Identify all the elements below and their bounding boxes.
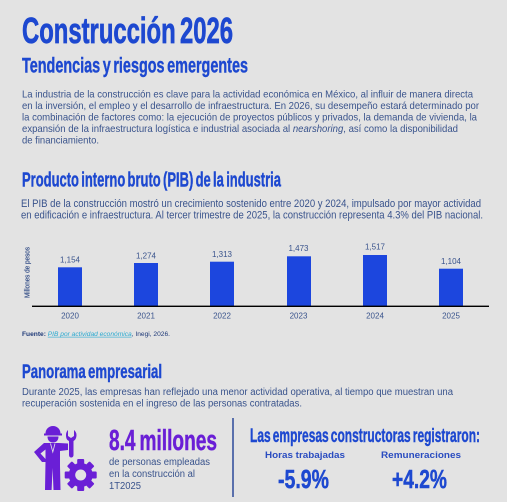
subtitle: Tendencias y riesgos emergentes [22,54,248,78]
year labels [61,312,460,320]
employed description: en la construcción al [109,469,195,480]
vertical divider [232,418,234,497]
y axis label: Millones de pesos [22,247,32,298]
value labels: 1,274 [136,252,157,260]
panorama paragraph: Durante 2025, las empresas han reflejado una menor actividad operativa, al tiempo que muestran una [22,387,453,398]
bars [58,255,463,306]
metric: remuneration: +4.2% [392,464,447,494]
panorama paragraph: recuperación sostenida en el ingreso de las personas contratadas. [22,398,302,410]
title: Construcción 2026 [22,10,233,51]
year labels: 2024 [366,312,384,320]
intro paragraph: la combinación de factores como: la ejecución de proyectos públicos y privados, la demanda de vivienda, la [22,112,477,124]
heading: panorama: Panorama empresarial [22,362,162,383]
value labels: 1,104 [441,257,462,266]
year labels: 2021 [137,312,155,320]
bar chart [22,242,489,320]
intro paragraph: de financiamiento. [22,136,99,146]
metric: hours worked: -5.9% [278,464,329,494]
axis line [32,306,489,307]
metric: remuneration [381,450,461,494]
year labels: 2025 [442,312,460,320]
employed description [109,457,210,492]
metric: hours worked: Horas trabajadas [265,450,345,461]
year labels: 2022 [213,312,231,320]
icon: construction worker with wrench and gear [34,426,97,491]
heading: PIB: Producto interno bruto (PIB) de la industria [22,170,282,192]
value labels: 1,313 [212,250,233,259]
value labels: 1,473 [288,244,309,253]
PIB paragraph [21,198,483,222]
value labels: 1,517 [365,242,386,252]
big number: employed people: 8.4 millones [109,425,217,457]
intro paragraph [22,90,479,146]
value labels [60,242,462,266]
intro paragraph: La industria de la construcción es clave para la actividad económica en México, al influir de manera directa [22,90,473,100]
panorama paragraph [22,387,453,410]
employed description: de personas empleadas [109,457,210,468]
year labels: 2023 [290,312,308,320]
metric: remuneration: Remuneraciones [381,450,461,461]
source note: Fuente: PIB por actividad económica , Inegi, 2026. [22,331,170,338]
value labels: 1,154 [60,256,81,264]
intro paragraph: en la inversión, el empleo y el desarrollo de infraestructura. En 2026, su desempeño estará determinado por [22,101,479,112]
employed description: 1T2025 [109,481,141,492]
metric: hours worked [265,450,345,494]
year labels: 2020 [61,312,79,320]
intro paragraph: expansión de la infraestructura logística e industrial asociada al nearshoring, así como la disponibilidad [22,124,458,135]
